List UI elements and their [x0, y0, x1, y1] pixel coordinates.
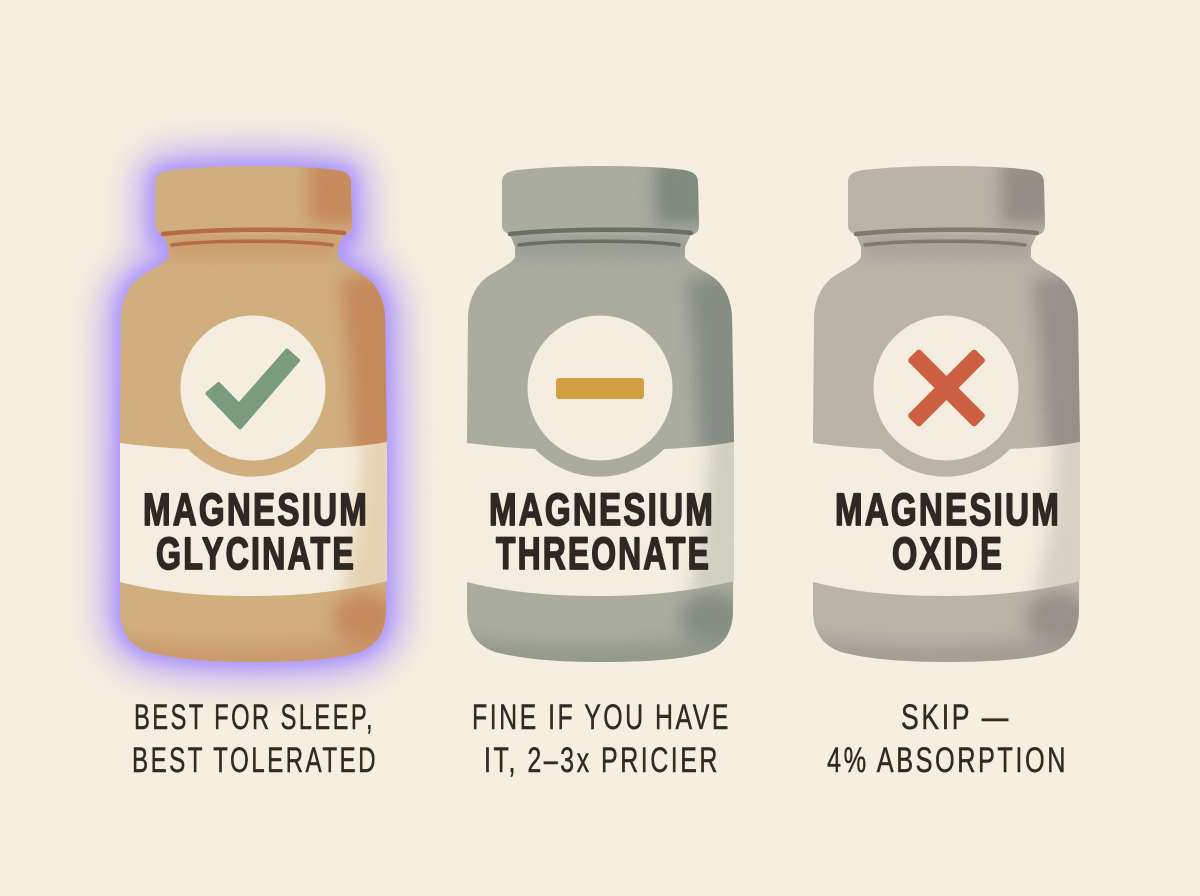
bottle name: magnesium oxide: MAGNESIUM [835, 484, 1061, 535]
caption: best for sleep: BEST TOLERATED [132, 741, 378, 780]
purple glow behind bottle [120, 166, 387, 662]
icon: check mark [208, 350, 298, 428]
bottle label [813, 442, 1080, 596]
badge circle [180, 316, 326, 460]
cap ridge lines [163, 230, 344, 245]
bottle name: magnesium threonate [489, 484, 715, 579]
bottle name: magnesium threonate: THREONATE [496, 528, 711, 579]
cap ridge lines [510, 230, 691, 245]
bottle cap [502, 166, 699, 235]
bottle cap [848, 166, 1045, 235]
caption: fine if you have it: IT, 2–3x PRICIER [484, 741, 720, 780]
bottle name: magnesium glycinate [143, 484, 369, 579]
cap ridge lines [856, 230, 1037, 245]
bottle label [467, 442, 734, 596]
badge circle [528, 316, 672, 460]
bottle body [120, 234, 387, 662]
bottle name: magnesium glycinate: MAGNESIUM [143, 484, 369, 535]
icon: cross [907, 348, 986, 428]
bottle label [120, 442, 387, 596]
bottle name: magnesium threonate: MAGNESIUM [489, 484, 715, 535]
bottle group: threonate [467, 166, 734, 662]
badge circle [874, 316, 1018, 460]
panel: magnesium oxide [813, 166, 1080, 772]
panel: magnesium threonate [467, 166, 734, 777]
caption: skip [827, 698, 1068, 780]
bottle group: oxide [813, 166, 1080, 662]
bottle body [467, 234, 734, 662]
caption: fine if you have it [472, 698, 731, 780]
caption: best for sleep: BEST FOR SLEEP, [134, 698, 375, 737]
caption: skip: 4% ABSORPTION [827, 741, 1068, 780]
bottle body [813, 234, 1080, 662]
bottle name: magnesium glycinate: GLYCINATE [156, 528, 356, 579]
bottle name: magnesium oxide [835, 484, 1061, 579]
caption: fine if you have it: FINE IF YOU HAVE [472, 698, 731, 737]
panel: magnesium glycinate [105, 160, 410, 780]
bottle name: magnesium oxide: OXIDE [892, 528, 1004, 579]
icon: minus [556, 378, 644, 399]
bottle cap [155, 166, 352, 235]
caption: skip: SKIP — [901, 698, 1011, 737]
caption: best for sleep [132, 698, 378, 780]
